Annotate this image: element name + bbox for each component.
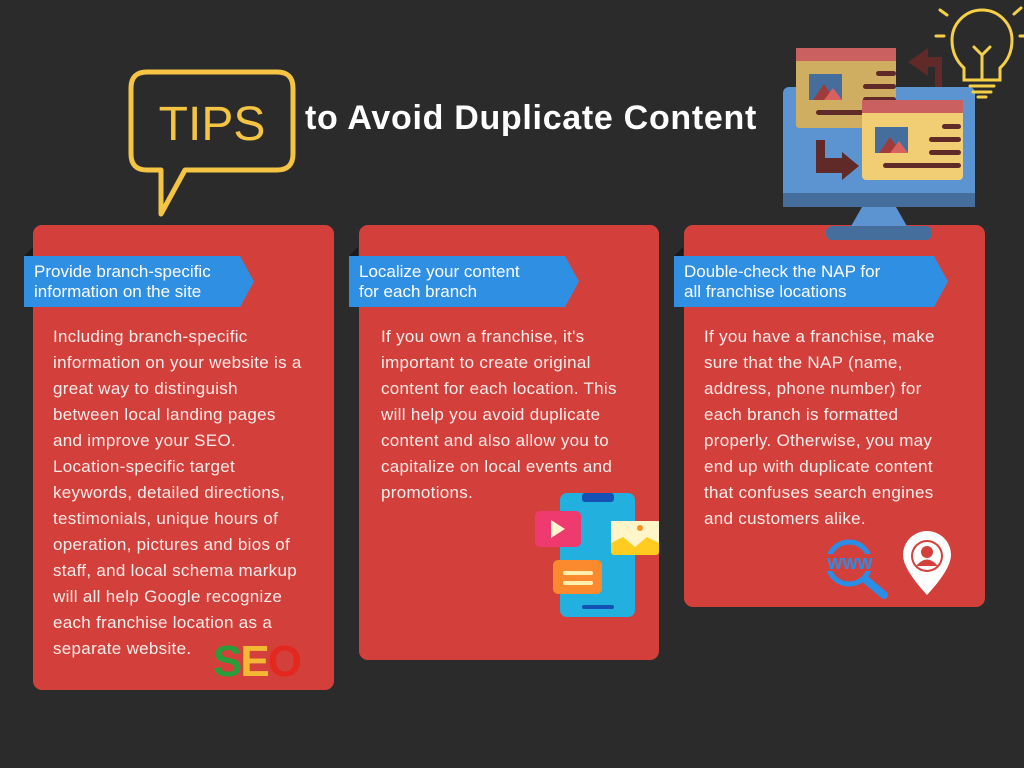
body text 1: and improve your SEO. [53,431,236,450]
body text 3 [704,327,935,528]
icon: SEO logo: SEO [213,637,300,686]
body text 1: Including branch-specific [53,327,248,346]
ribbon 2 [349,256,579,307]
body text 3: each branch is formatted [704,405,898,424]
body text 1: Location-specific target [53,457,235,476]
body text 2: promotions. [381,483,473,502]
body text 2: important to create original [381,353,591,372]
ribbon 2: for each branch [359,282,477,301]
ribbon 2: Localize your content [359,262,520,281]
ribbon 3 [674,256,948,307]
icon: www search: WWW [827,556,874,573]
icon: phone with media [535,493,659,617]
body text 1: testimonials, unique hours of [53,509,278,528]
body text 3: properly. Otherwise, you may [704,431,932,450]
body text 3: If you have a franchise, make [704,327,935,346]
title: to Avoid Duplicate Content [305,99,757,137]
body text 1 [53,327,302,658]
icon: location pin [903,531,951,595]
body text 3: end up with duplicate content [704,457,933,476]
body text 3: that confuses search engines [704,483,934,502]
body text 2: content and also allow you to [381,431,609,450]
body text 3: and customers alike. [704,509,866,528]
title bubble: TIPS: TIPS [159,98,265,151]
panel 3 [684,225,985,607]
ribbon 3: all franchise locations [684,282,847,301]
body text 1: operation, pictures and bios of [53,535,290,554]
body text 1: separate website. [53,639,191,658]
panel 2 [359,225,659,660]
body text 1: each franchise location as a [53,613,272,632]
body text 3: address, phone number) for [704,379,922,398]
body text 2: content for each location. This [381,379,617,398]
title bubble: TIPS [128,70,296,216]
ribbon 3: Double-check the NAP for [684,262,880,281]
body text 2: will help you avoid duplicate [381,405,600,424]
body text 1: information on your website is a [53,353,302,372]
body text 1: will all help Google recognize [53,587,282,606]
body text 1: great way to distinguish [53,379,238,398]
body text 1: staff, and local schema markup [53,561,297,580]
panel 1 [33,225,334,690]
icon: computer with duplicate pages and lightbulb [783,6,1024,240]
ribbon 1 [24,256,254,307]
icon: www search [826,540,888,599]
body text 2: If you own a franchise, it's [381,327,584,346]
body text 1: between local landing pages [53,405,276,424]
body text 2 [381,327,617,502]
body text 3: sure that the NAP (name, [704,353,903,372]
ribbon 1: Provide branch-specific [34,262,211,281]
body text 1: keywords, detailed directions, [53,483,285,502]
ribbon 1: information on the site [34,282,201,301]
body text 2: capitalize on local events and [381,457,612,476]
